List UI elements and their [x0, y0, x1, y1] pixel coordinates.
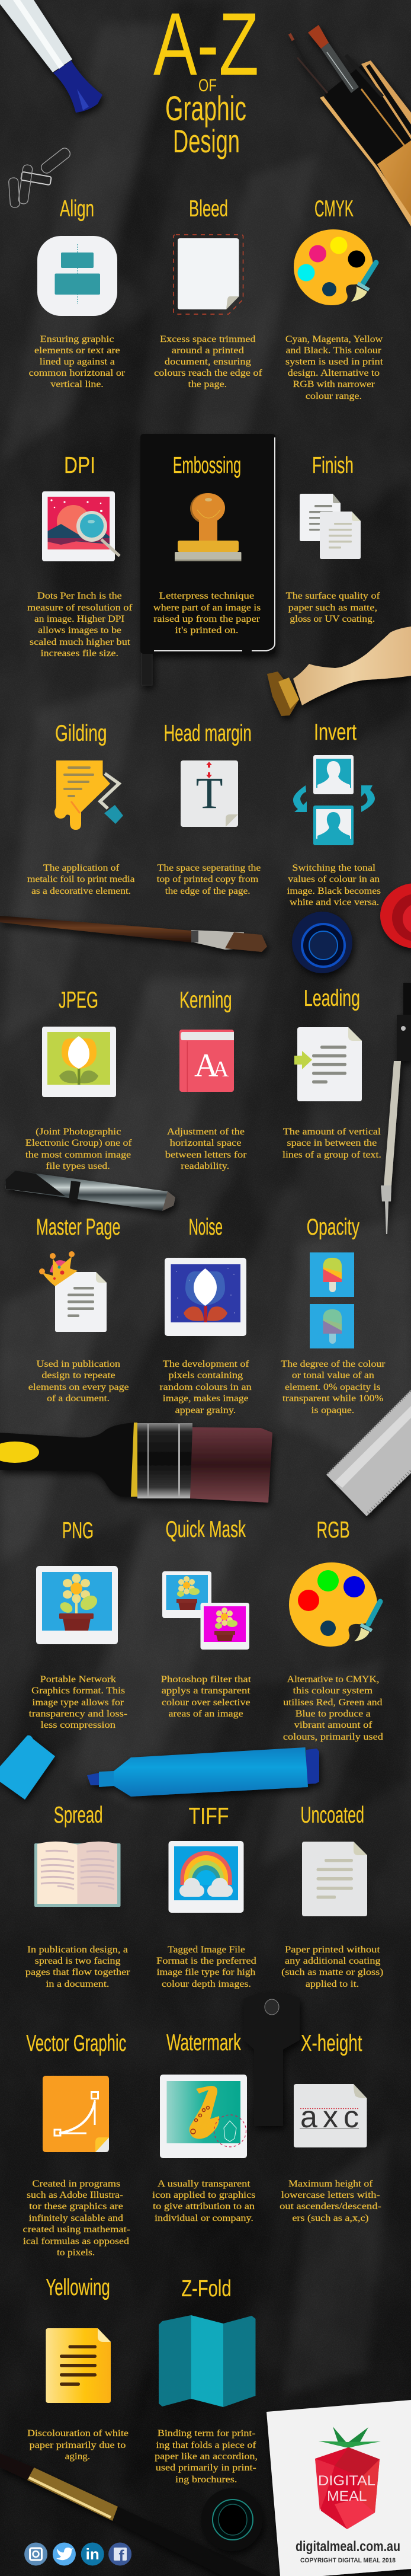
icon: kerning book: A	[213, 1057, 229, 1082]
icon: kerning book: A	[194, 1047, 219, 1084]
description: RGB: colours, primarily used	[283, 1732, 383, 1742]
description: Uncoated: Paper printed without	[285, 1945, 380, 1955]
icon: RGB palette	[289, 1562, 380, 1647]
description: Embossing: where part of an image is	[153, 603, 261, 613]
icon: embossing stamp	[175, 493, 242, 561]
description: TIFF: Tagged Image File	[168, 1945, 245, 1955]
description: Align: common horiztonal or	[29, 368, 126, 378]
description: RGB: Alternative to CMYK,	[287, 1674, 379, 1685]
description: Kerning: readability.	[181, 1161, 229, 1171]
title: A-Z of Graphic Design	[153, 0, 259, 159]
description: Watermark	[152, 2179, 255, 2223]
icon: spread open book	[34, 1842, 121, 1907]
title: A-Z of Graphic Design: Design	[173, 123, 240, 159]
heading: Yellowing: Yellowing	[46, 2275, 110, 2300]
description: Leading: space in between the	[287, 1138, 377, 1148]
icon: vector graphic bezier	[43, 2076, 109, 2152]
icon: x-height page: a x c	[300, 2100, 359, 2134]
panel: JPEG	[25, 987, 132, 1171]
icon: kerning book	[179, 1030, 234, 1092]
description: Embossing: raised up from the paper	[153, 614, 261, 624]
description: JPEG	[25, 1127, 132, 1171]
description: Head margin: The space seperating the	[158, 863, 261, 873]
heading: Finish: Finish	[312, 453, 354, 478]
panel: Head margin	[157, 721, 261, 896]
description: Noise: pixels containing	[168, 1370, 243, 1380]
icon: finish documents	[300, 494, 361, 559]
wooden box with paint brushes top-right	[290, 25, 411, 226]
heading: Kerning: Kerning	[179, 987, 232, 1013]
description: TIFF	[156, 1945, 256, 1989]
panel: Invert	[287, 720, 381, 907]
description: Master Page: Used in publication	[37, 1359, 120, 1369]
description: Leading	[282, 1127, 381, 1160]
description: Bleed: around a printed	[172, 346, 244, 356]
description: DPI: measure of resolution of	[27, 603, 133, 613]
panel: Noise	[160, 1215, 252, 1415]
description: Watermark: to give attribution to an	[153, 2201, 255, 2211]
black USB key	[244, 1993, 300, 2126]
description: Opacity: element. 0% opacity is	[285, 1382, 380, 1392]
icon: instagram	[24, 2543, 47, 2565]
icon: head margin page: T	[196, 769, 223, 818]
icon: invert portraits	[293, 755, 375, 845]
description: Z-Fold: paper like an accordion,	[155, 2452, 258, 2462]
compass on the right edge	[381, 983, 411, 1234]
heading: Opacity: Opacity	[307, 1215, 359, 1240]
teal ink pot	[201, 2488, 263, 2551]
description: Yellowing	[27, 2428, 129, 2462]
heading: Noise: Noise	[189, 1215, 223, 1240]
icon: linkedin: in	[86, 2545, 99, 2563]
marker: white and blue pen top-left	[0, 0, 102, 113]
panel: X-height	[280, 2031, 381, 2223]
description: CMYK: Cyan, Magenta, Yellow	[285, 334, 383, 344]
silver pen	[5, 1171, 175, 1211]
description: JPEG: file types used.	[46, 1161, 110, 1171]
description: Kerning	[165, 1127, 247, 1171]
description: Spread: pages that flow together	[25, 1967, 130, 1977]
panel: TIFF	[156, 1804, 256, 1989]
description: Vector Graphic: to pixels.	[57, 2248, 95, 2258]
heading: Master Page: Master Page	[36, 1215, 121, 1240]
description: CMYK: colour range.	[306, 391, 362, 401]
panel: PNG	[29, 1518, 127, 1730]
icon: TIFF rainbow photo	[168, 1841, 244, 1913]
description: Vector Graphic: tor these graphics are	[29, 2201, 123, 2211]
description: CMYK: system is used in print	[285, 357, 384, 367]
panel: Finish	[286, 453, 380, 624]
description: Embossing: it's printed on.	[175, 625, 239, 635]
description: Uncoated: any additional coating	[285, 1956, 380, 1966]
icon: facebook	[108, 2543, 131, 2565]
description: DPI	[27, 591, 133, 659]
description: Leading: lines of a group of text.	[282, 1150, 381, 1160]
description: Kerning: Adjustment of the	[167, 1127, 245, 1137]
description: Quick Mask: Photoshop filter that	[161, 1674, 252, 1685]
heading: Vector Graphic: Vector Graphic	[26, 2031, 126, 2056]
description: X-height: ers (such as a,x,c)	[292, 2213, 369, 2223]
description: Kerning: between letters for	[165, 1150, 247, 1160]
description: Invert: white and vice versa.	[290, 897, 379, 907]
heading: Bleed: Bleed	[189, 196, 228, 222]
description: DPI: scaled much higher but	[30, 637, 131, 647]
description: Uncoated: (such as matte or gloss)	[281, 1967, 383, 1977]
panel: Opacity	[281, 1215, 386, 1415]
icon: yellowing document	[46, 2328, 111, 2403]
heading: Z-Fold: Z-Fold	[181, 2276, 232, 2302]
title: A-Z of Graphic Design: OF	[198, 76, 217, 95]
description: RGB: utilises Red, Green and	[283, 1698, 383, 1708]
heading: Invert: Invert	[314, 720, 357, 745]
description: Vector Graphic: ical formulas as opposed	[23, 2236, 129, 2246]
wax seal stamp	[267, 627, 411, 716]
icon: z-fold brochure	[159, 2315, 256, 2407]
description: Spread: In publication design, a	[27, 1945, 128, 1955]
description: Yellowing: Discolouration of white	[27, 2428, 129, 2438]
description: TIFF: colour depth images.	[162, 1979, 251, 1989]
description: X-height: Maximum height of	[288, 2179, 373, 2189]
description: Z-Fold: ing that folds a piece of	[156, 2440, 256, 2450]
description: Spread: spread is two facing	[35, 1956, 120, 1966]
description: Align: elements or text are	[34, 346, 120, 356]
description: Bleed: colours reach the edge of	[154, 368, 262, 378]
description: Watermark: A usually transparent	[158, 2179, 251, 2189]
panel: Watermark	[152, 2030, 255, 2223]
panel: Master Page	[28, 1215, 129, 1404]
description: Vector Graphic	[23, 2179, 130, 2258]
logo: strawberry: MEAL	[327, 2488, 367, 2504]
heading: JPEG: JPEG	[59, 987, 98, 1013]
heading: PNG: PNG	[62, 1518, 94, 1543]
icon: CMYK palette	[294, 229, 376, 305]
description: PNG: Graphics format. This	[31, 1686, 125, 1696]
icon: x-height page	[294, 2084, 367, 2147]
description: CMYK: and Black. This colour	[286, 346, 381, 356]
description: JPEG: the most common image	[25, 1150, 131, 1160]
icon: noise photo	[165, 1258, 246, 1336]
description: Z-Fold: ing brochures.	[175, 2475, 237, 2485]
description: PNG: less compression	[41, 1720, 115, 1730]
description: Yellowing: paper primarily due to	[30, 2440, 126, 2450]
description: Noise: random colours in an	[160, 1382, 252, 1392]
icon: PNG flower photo	[36, 1566, 118, 1644]
heading: Head margin: Head margin	[163, 721, 252, 746]
description: DPI: Dots Per Inch is the	[37, 591, 122, 601]
heading: Uncoated: Uncoated	[301, 1802, 364, 1828]
heading: Quick Mask: Quick Mask	[166, 1517, 246, 1542]
description: Bleed: document, ensuring	[165, 357, 251, 367]
icon: bleed page	[174, 235, 243, 314]
description: CMYK: RGB with narrower	[293, 379, 375, 389]
description: PNG: Portable Network	[40, 1674, 116, 1685]
description: Invert: values of colour in an	[288, 874, 380, 884]
icon: DPI photo with magnifier	[42, 491, 120, 561]
description: Spread: in a document.	[46, 1979, 109, 1989]
description: Invert	[287, 863, 381, 907]
blue highlighter with cap	[0, 1736, 319, 1800]
description: Noise	[160, 1359, 252, 1415]
panel: Quick Mask	[161, 1517, 252, 1719]
description: Watermark: individual or company.	[155, 2213, 253, 2223]
heading: DPI: DPI	[64, 453, 95, 478]
steel ruler	[326, 1390, 411, 1516]
black paint brush bottom-left	[0, 2453, 267, 2576]
description: DPI: increases file size.	[41, 648, 118, 659]
description: PNG: transparency and loss-	[29, 1709, 127, 1719]
black notebook behind Embossing	[140, 434, 275, 685]
panel: Bleed	[154, 196, 262, 389]
description: Noise: The development of	[163, 1359, 249, 1369]
description: Bleed: the page.	[188, 379, 227, 389]
icon: leading document	[294, 1027, 362, 1101]
panel: Align	[29, 196, 126, 389]
panel: Embossing	[153, 453, 261, 635]
panel: Uncoated	[281, 1802, 383, 1989]
description: Quick Mask	[161, 1674, 252, 1719]
description: JPEG: Electronic Group) one of	[25, 1138, 132, 1148]
description: Invert: Switching the tonal	[292, 863, 376, 873]
icon: head margin page	[181, 760, 238, 827]
large paint brush with yellow grip	[0, 1423, 272, 1503]
description: RGB: vibrant amount of	[294, 1720, 373, 1730]
description: Quick Mask: colour over selective	[162, 1698, 251, 1708]
panel: CMYK	[285, 196, 384, 401]
description: JPEG: (Joint Photographic	[36, 1127, 121, 1137]
description: TIFF: Format is the preferred	[156, 1956, 256, 1966]
description: Finish: gloss or UV coating.	[290, 614, 375, 624]
heading: Align: Align	[60, 196, 94, 222]
icon: master page document with crown	[39, 1251, 107, 1332]
description: RGB: Blue to produce a	[296, 1709, 371, 1719]
heading: Leading: Leading	[304, 986, 360, 1011]
description: Gilding: metalic foil to print media	[27, 874, 134, 884]
description: Master Page	[28, 1359, 129, 1404]
icon: watermark saxophone photo	[160, 2075, 247, 2158]
description: Finish	[286, 591, 380, 624]
panel: Z-Fold	[155, 2276, 258, 2485]
description: Bleed	[154, 334, 262, 389]
icon: quick mask photos	[162, 1571, 249, 1650]
description: Vector Graphic: infinitely scalable and	[29, 2213, 123, 2223]
red paint pot	[380, 883, 411, 948]
description: Yellowing: aging.	[65, 2452, 90, 2462]
description: DPI: allows images to be	[38, 625, 121, 635]
icon: opacity popsicles	[310, 1252, 354, 1348]
description: Noise: appear grainy.	[175, 1405, 236, 1415]
copyright: COPYRIGHT DIGITAL MEAL 2018	[300, 2557, 396, 2564]
icon: twitter	[53, 2543, 76, 2565]
description: Master Page: elements on every page	[28, 1382, 129, 1392]
icon: JPEG tulip photo	[42, 1027, 116, 1097]
description: X-height	[280, 2179, 381, 2223]
heading: Watermark: Watermark	[166, 2030, 241, 2056]
description: Align: vertical line.	[50, 379, 104, 389]
title: A-Z of Graphic Design: Graphic	[165, 90, 246, 128]
panel: DPI	[27, 453, 133, 659]
description: Watermark: icon applied to graphics	[152, 2190, 255, 2200]
paper clips	[8, 146, 72, 207]
heading: X-height: X-height	[301, 2031, 362, 2056]
description: Spread	[25, 1945, 130, 1989]
description: Master Page: design to repeate	[41, 1370, 115, 1380]
icon: gilding roller	[54, 760, 123, 830]
description: Opacity	[281, 1359, 386, 1415]
Digital Meal business card	[266, 2400, 411, 2576]
description: X-height: lowercase letters with-	[281, 2190, 380, 2200]
description: Align: Ensuring graphic	[40, 334, 114, 344]
icon: linkedin	[81, 2543, 104, 2565]
description: Finish: The surface quality of	[286, 591, 380, 601]
description: Uncoated	[281, 1945, 383, 1989]
description: Invert: image. Black becomes	[287, 886, 381, 896]
heading: Gilding: Gilding	[55, 721, 107, 746]
heading: Spread: Spread	[54, 1802, 103, 1828]
description: Embossing: Letterpress technique	[159, 591, 254, 601]
panel: Kerning	[165, 987, 247, 1171]
description: PNG: image type allows for	[32, 1698, 124, 1708]
description: Uncoated: applied to it.	[306, 1979, 359, 1989]
description: TIFF: image file type for high	[157, 1967, 255, 1977]
heading: CMYK: CMYK	[314, 196, 354, 222]
description: RGB	[283, 1674, 383, 1742]
description: Embossing	[153, 591, 261, 635]
description: Opacity: The degree of the colour	[281, 1359, 386, 1369]
heading: TIFF: TIFF	[189, 1804, 229, 1829]
description: Z-Fold: used primarily in print-	[156, 2463, 256, 2473]
logo: strawberry: DIGITAL	[318, 2473, 375, 2489]
heading: Embossing: Embossing	[173, 453, 241, 478]
panel: Vector Graphic	[23, 2031, 130, 2258]
blue paint pot	[292, 912, 352, 973]
description: Z-Fold: Binding term for print-	[158, 2428, 255, 2438]
description: Head margin	[157, 863, 261, 896]
description: Finish: paper such as matte,	[288, 603, 377, 613]
description: Vector Graphic: created using mathemat-	[23, 2225, 130, 2235]
description: Vector Graphic: Created in programs	[32, 2179, 120, 2189]
panel: RGB	[283, 1517, 383, 1742]
description: Gilding: as a decorative element.	[31, 886, 131, 896]
description: Noise: image, makes image	[163, 1394, 249, 1404]
panel: Leading	[282, 986, 381, 1160]
description: PNG	[29, 1674, 127, 1730]
description: DPI: an image. Higher DPI	[34, 614, 124, 624]
description: Head margin: top of printed copy from	[157, 874, 259, 884]
icon: uncoated document	[302, 1842, 367, 1916]
logo: strawberry	[315, 2427, 381, 2529]
description: Bleed: Excess space trimmed	[160, 334, 256, 344]
description: Opacity: is opaque.	[312, 1405, 354, 1415]
icon: align	[37, 236, 117, 316]
description: Align: lined up against a	[40, 357, 115, 367]
description: Vector Graphic: such as Adobe Illustra-	[27, 2190, 123, 2200]
description: Gilding: The application of	[43, 863, 120, 873]
description: Kerning: horizontal space	[170, 1138, 242, 1148]
description: X-height: out ascenders/descend-	[280, 2201, 381, 2211]
social media icons	[24, 2543, 131, 2565]
panel: Yellowing	[27, 2275, 129, 2462]
description: Z-Fold	[155, 2428, 258, 2485]
description: Leading: The amount of vertical	[283, 1127, 381, 1137]
description: CMYK	[285, 334, 384, 401]
description: Gilding	[27, 863, 134, 896]
panel: Gilding	[27, 721, 134, 896]
description: Quick Mask: applys a transparent	[162, 1686, 251, 1696]
description: RGB: this colour system	[293, 1686, 373, 1696]
description: Align	[29, 334, 126, 389]
description: Master Page: of a document.	[47, 1394, 110, 1404]
description: Opacity: or tonal value of an	[292, 1370, 374, 1380]
paint brush across the page	[0, 916, 267, 952]
icon: facebook: f	[118, 2547, 124, 2565]
description: CMYK: design. Alternative to	[288, 368, 380, 378]
description: Head margin: the edge of the page.	[165, 886, 251, 896]
description: Opacity: transparent while 100%	[282, 1394, 383, 1404]
description: Quick Mask: areas of an image	[168, 1709, 243, 1719]
panel: Spread	[25, 1802, 130, 1989]
heading: RGB: RGB	[316, 1517, 350, 1543]
